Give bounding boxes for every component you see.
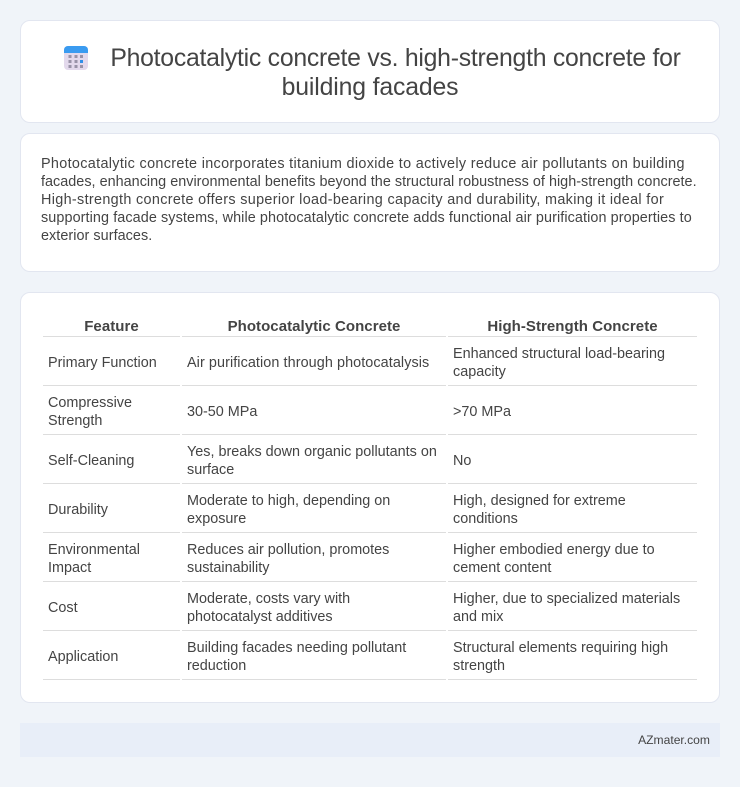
row: Compressive Strength: Strength <box>48 413 102 429</box>
cell: 30-50 MPa <box>187 404 257 420</box>
header: Photocatalytic Concrete <box>182 318 446 337</box>
cell: sustainability <box>187 560 269 576</box>
cell: Enhanced structural load-bearing <box>453 346 665 362</box>
header: Feature: Feature <box>84 318 139 335</box>
row: Application <box>43 631 180 680</box>
row: Compressive Strength: Compressive <box>48 395 132 411</box>
cell <box>182 337 446 386</box>
title: building facades <box>282 74 458 101</box>
cell <box>182 582 446 631</box>
row: Primary Function <box>43 337 180 386</box>
intro text: Photocatalytic concrete incorporates titanium dioxide to actively reduce air pollutants on building <box>41 156 685 172</box>
cell: Reduces air pollution, promotes <box>187 542 389 558</box>
cell <box>448 386 697 435</box>
cell <box>448 582 697 631</box>
cell: Higher embodied energy due to <box>453 542 655 558</box>
title: Photocatalytic concrete vs. high-strength concrete for <box>110 45 681 72</box>
row: Environmental Impact: Impact <box>48 560 91 576</box>
cell: >70 MPa <box>453 404 511 420</box>
header: High-Strength Concrete <box>448 318 697 337</box>
cell: High, designed for extreme <box>453 493 626 509</box>
cell <box>182 484 446 533</box>
row: Durability: Durability <box>48 502 108 518</box>
cell: cement content <box>453 560 551 576</box>
cell <box>182 631 446 680</box>
cell <box>448 484 697 533</box>
intro text <box>41 156 697 244</box>
cell <box>182 533 446 582</box>
panel: title card <box>20 20 720 123</box>
footer text: AZmater.com <box>638 733 710 747</box>
cell <box>448 533 697 582</box>
cell: and mix <box>453 609 503 625</box>
row: Compressive Strength <box>43 386 180 435</box>
cell: surface <box>187 462 234 478</box>
header: Photocatalytic Concrete: Photocatalytic Concrete <box>228 318 400 335</box>
intro text: High-strength concrete offers superior load-bearing capacity and durability, making it ideal for <box>41 192 664 208</box>
panel: intro card <box>20 133 720 272</box>
cell: photocatalyst additives <box>187 609 333 625</box>
row: Application: Application <box>48 649 118 665</box>
cell: Yes, breaks down organic pollutants on <box>187 444 437 460</box>
cell: Structural elements requiring high <box>453 640 668 656</box>
icon: calendar <box>64 46 88 70</box>
cell: conditions <box>453 511 518 527</box>
cell <box>182 435 446 484</box>
row: Durability <box>43 484 180 533</box>
intro text: exterior surfaces. <box>41 228 152 244</box>
row: Self-Cleaning: Self-Cleaning <box>48 453 134 469</box>
cell: Air purification through photocatalysis <box>187 355 429 371</box>
row: Cost: Cost <box>48 600 78 616</box>
cell: strength <box>453 658 505 674</box>
cell: reduction <box>187 658 246 674</box>
intro text: supporting facade systems, while photocatalytic concrete adds functional air purification properties to <box>41 210 692 226</box>
row: Environmental Impact: Environmental <box>48 542 140 558</box>
cell: Building facades needing pollutant <box>187 640 406 656</box>
cell <box>448 631 697 680</box>
cell: Moderate, costs vary with <box>187 591 350 607</box>
cell: Moderate to high, depending on <box>187 493 390 509</box>
footer bar <box>20 723 720 757</box>
row: Cost <box>43 582 180 631</box>
cell: capacity <box>453 364 506 380</box>
panel: comparison table card <box>20 292 720 703</box>
row: Environmental Impact <box>43 533 180 582</box>
cell: No <box>453 453 471 469</box>
row: Self-Cleaning <box>43 435 180 484</box>
cell <box>182 386 446 435</box>
row: Primary Function: Primary Function <box>48 355 157 371</box>
cell <box>448 337 697 386</box>
cell: Higher, due to specialized materials <box>453 591 680 607</box>
cell: exposure <box>187 511 246 527</box>
header: Feature <box>43 318 180 337</box>
cell <box>448 435 697 484</box>
title <box>110 45 681 101</box>
intro text: facades, enhancing environmental benefits beyond the structural robustness of high-strength concrete. <box>41 174 697 190</box>
header: High-Strength Concrete: High-Strength Concrete <box>487 318 658 335</box>
